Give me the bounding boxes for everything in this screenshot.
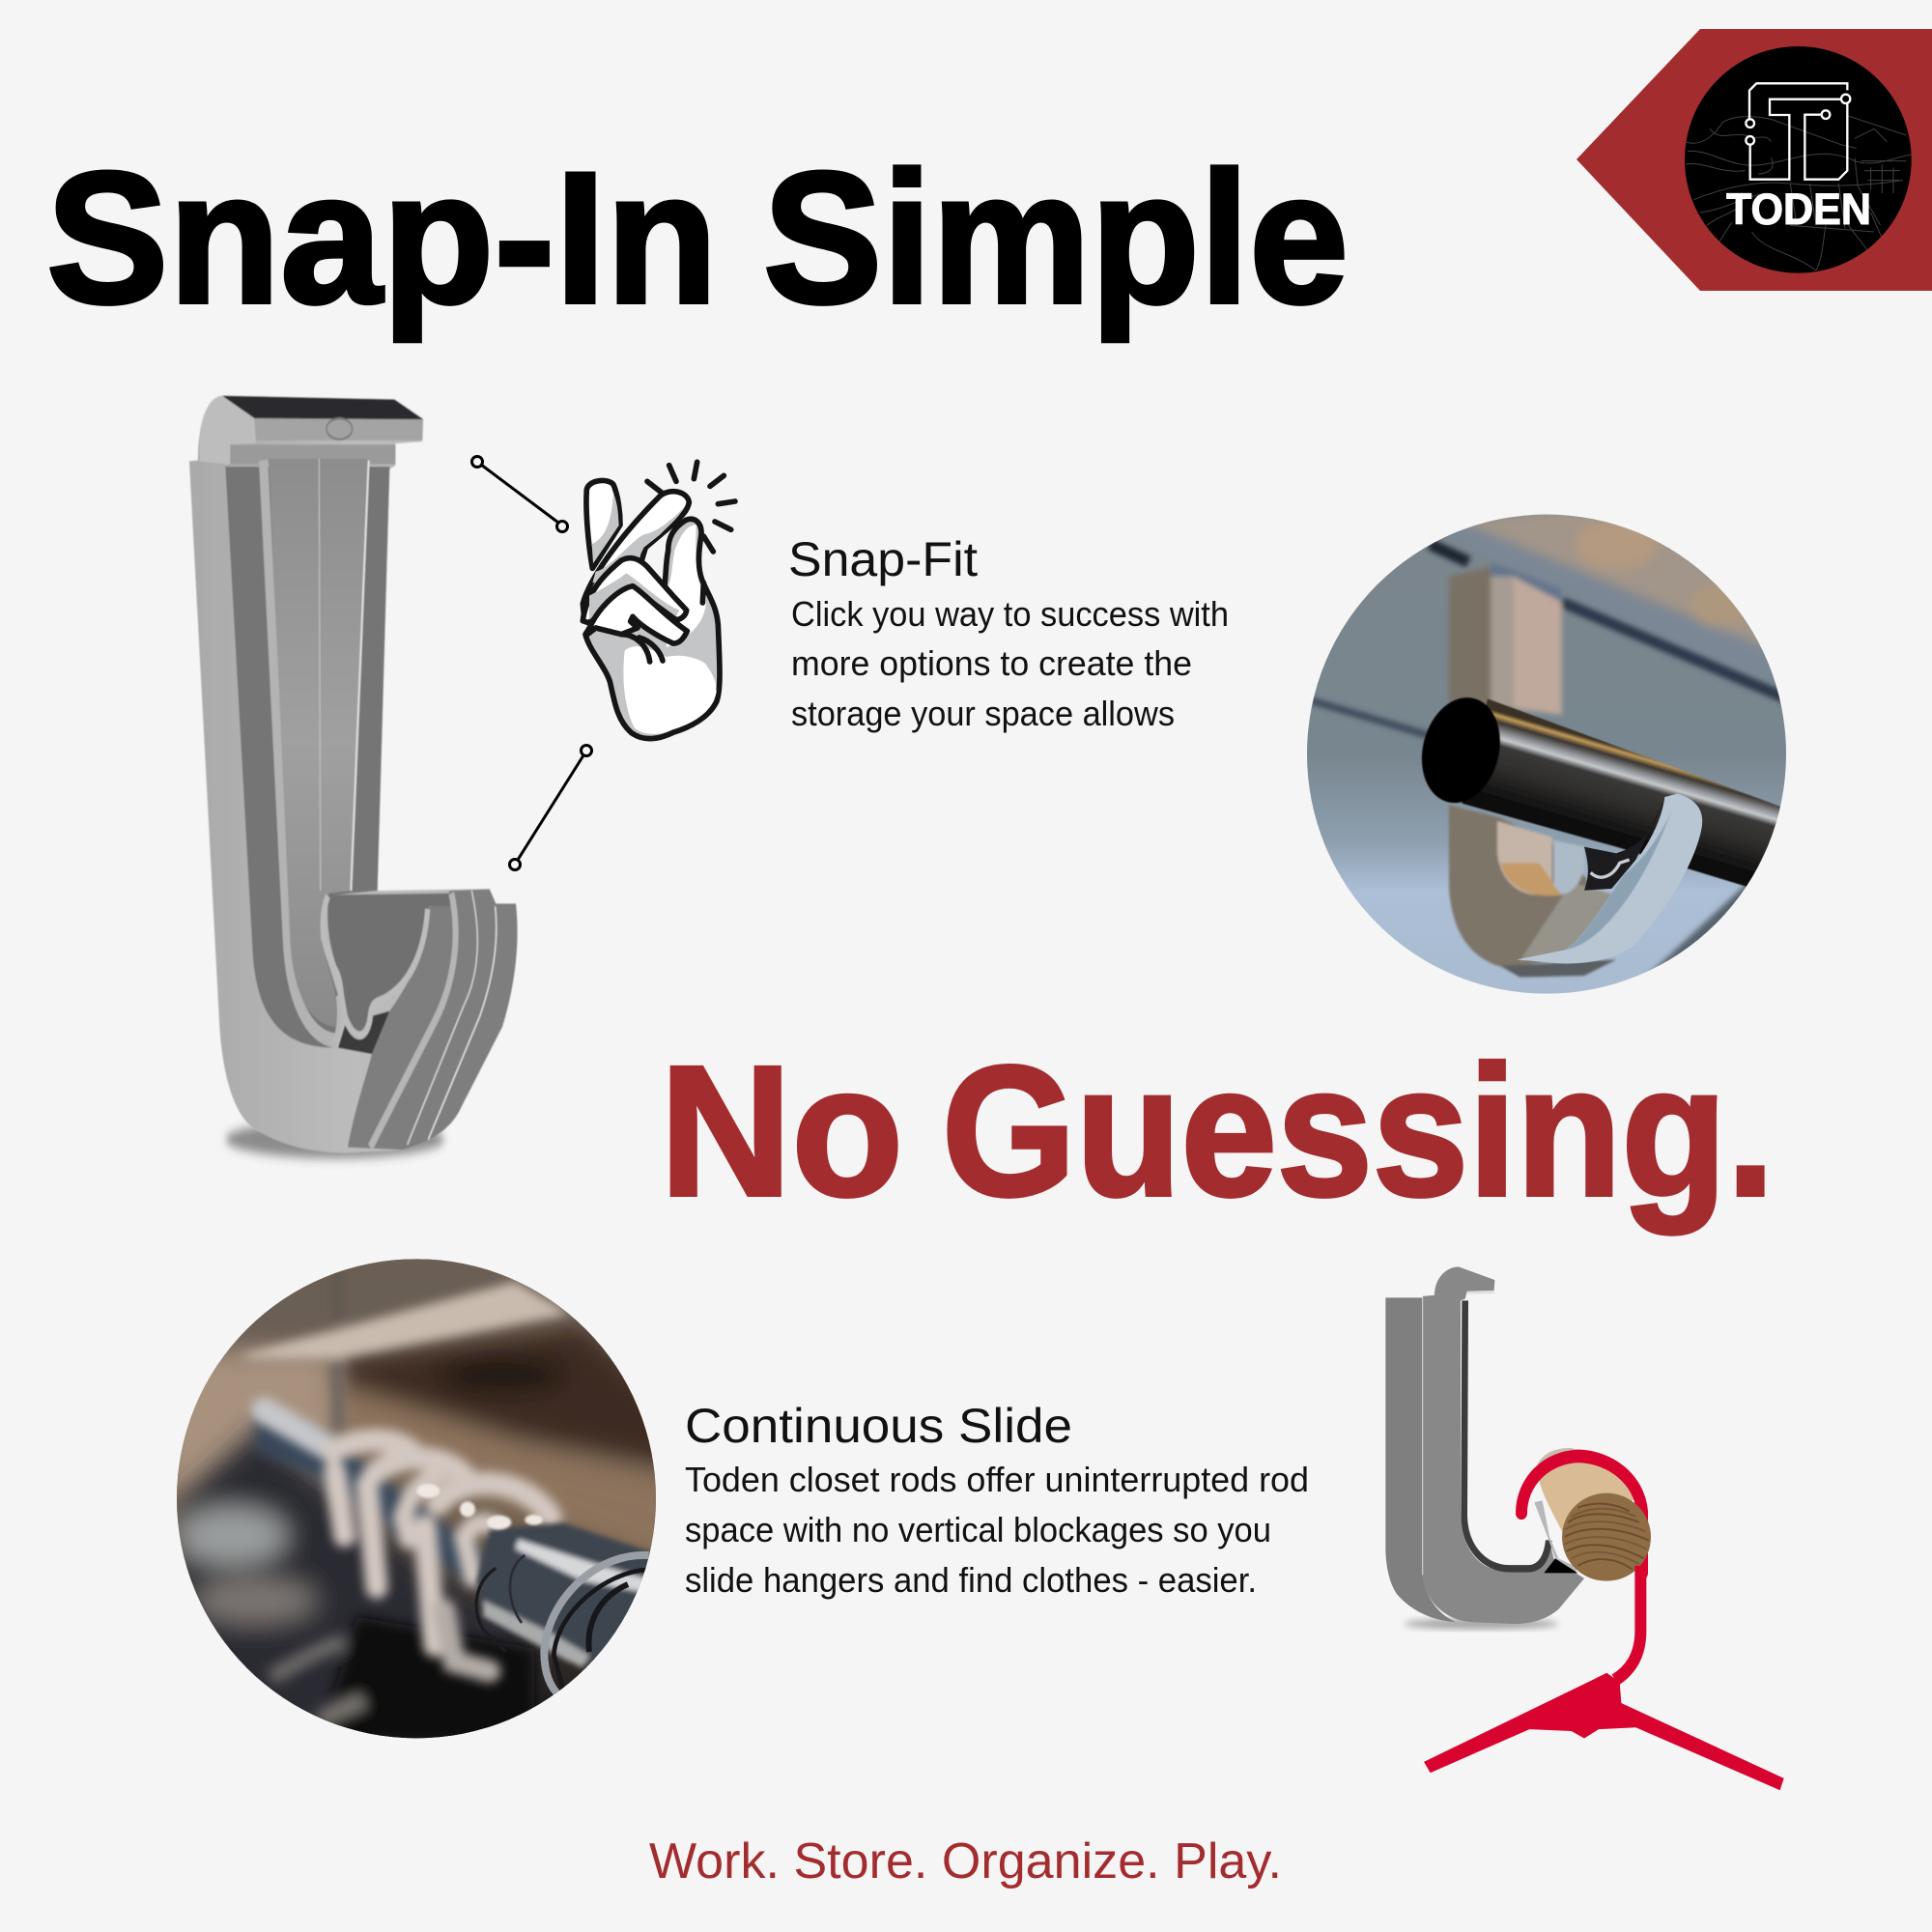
logo circle bbox=[1685, 46, 1912, 273]
title: Snap-In Simple: Simple bbox=[763, 133, 1349, 343]
photo: rod in clear bracket bbox=[1304, 509, 1790, 998]
text block: Continuous Slide bbox=[685, 1399, 1309, 1600]
body: Continuous Slide description: slide hangers and find clothes - easier. bbox=[685, 1560, 1257, 1600]
badge arrow bbox=[1577, 29, 1932, 291]
heading: No Guessing.: No bbox=[660, 1027, 903, 1235]
tagline: Work. Store. Organize. Play. bbox=[649, 1833, 1282, 1889]
title: Snap-In Simple bbox=[46, 133, 1349, 343]
product: hook with wooden rod and red hanger bbox=[1385, 1266, 1784, 1790]
body: Snap-Fit description: more options to create the bbox=[791, 643, 1192, 683]
photo: hangers on closet rod bbox=[177, 1259, 656, 1739]
heading: Snap-Fit: Snap-Fit bbox=[788, 532, 978, 586]
heading: Continuous Slide: Continuous Slide bbox=[685, 1399, 1072, 1453]
logo badge bbox=[1577, 29, 1932, 291]
body: Continuous Slide description: space with no vertical blockages so you bbox=[685, 1510, 1271, 1549]
title: Snap-In Simple: Snap-In bbox=[46, 133, 718, 343]
logo wordmark: TODEN bbox=[1726, 185, 1871, 234]
body: Snap-Fit description: storage your space allows bbox=[791, 694, 1175, 733]
body: Snap-Fit description: Click you way to success with bbox=[791, 594, 1229, 634]
connector line upper bbox=[471, 456, 568, 531]
icon: snapping fingers bbox=[582, 462, 735, 739]
heading: No Guessing.: Guessing. bbox=[942, 1027, 1775, 1235]
connector line lower bbox=[510, 746, 591, 869]
body: Continuous Slide description: Toden closet rods offer uninterrupted rod bbox=[685, 1460, 1309, 1499]
body: Continuous Slide description bbox=[685, 1460, 1309, 1600]
body: Snap-Fit description bbox=[791, 594, 1229, 733]
product: large grey hook bbox=[189, 396, 518, 1158]
text block: Snap-Fit bbox=[788, 532, 1229, 733]
